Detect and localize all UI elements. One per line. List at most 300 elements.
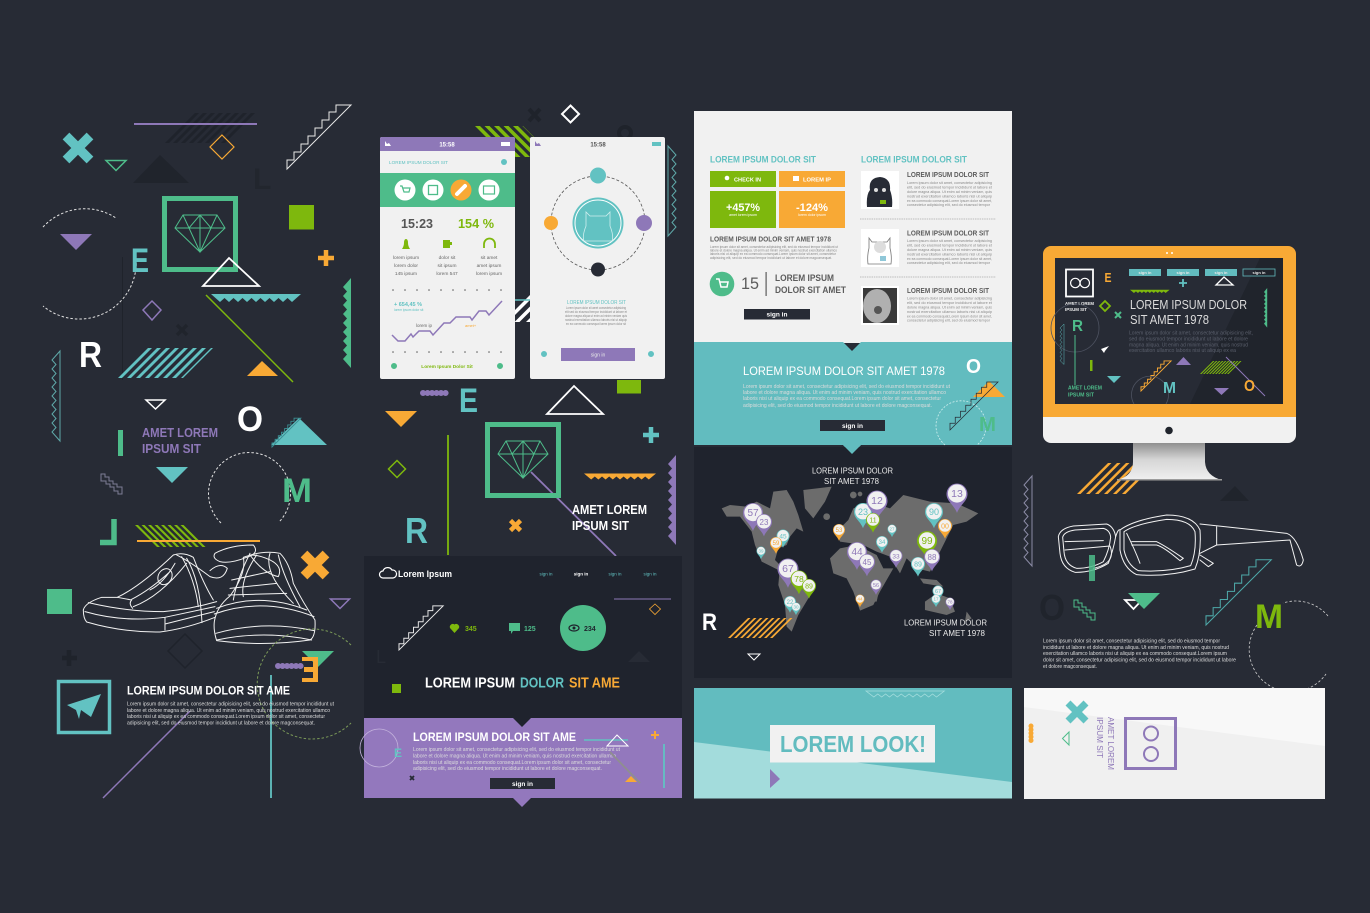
- orange stairs: [1141, 361, 1171, 391]
- white hatch between phones: [519, 290, 566, 322]
- lime diamond: [1100, 301, 1110, 311]
- purple line: [1226, 357, 1265, 396]
- screen title: [1130, 298, 1247, 327]
- letter R: R: [702, 609, 717, 636]
- dark triangle: [133, 155, 189, 183]
- lorem ip icon: [793, 176, 799, 181]
- body text: Lorem ipsum dolor sit amet, consectetur adipisicing elit, sed do eiusmod tempor incididunt ut: [127, 702, 335, 708]
- body text: et dolore magconsequat.: [1043, 664, 1097, 670]
- dark cross: [529, 109, 540, 121]
- purple diagonal line: [103, 711, 190, 798]
- olive diamond: [388, 460, 406, 478]
- center avatar: [572, 198, 624, 248]
- button lorem ip: [779, 171, 845, 187]
- metric 234: 234: [584, 626, 596, 633]
- stat value green: +457%: [726, 202, 760, 214]
- zigzag: [1060, 324, 1064, 364]
- lime hatch: [146, 525, 196, 547]
- screen label: AMET LOREM: [1068, 386, 1102, 392]
- map pins: 17: [933, 597, 939, 602]
- map pins: 45: [863, 558, 872, 567]
- line chart: [392, 301, 502, 341]
- purple line: [134, 123, 257, 125]
- screen nav: sign in: [1177, 270, 1190, 275]
- body text: Lorem ipsum dolor sit amet, consectetur adipisicing elit, sed do eiusmod tempor incididunt ut: [710, 245, 838, 249]
- clock text: 15:58: [590, 142, 606, 148]
- sign in button: [744, 309, 810, 320]
- lime square: [617, 380, 641, 394]
- icon: bell: [402, 239, 410, 249]
- stat orange: [779, 191, 845, 228]
- icon: stairs: [399, 606, 443, 650]
- white small triangle: [1125, 600, 1142, 609]
- list item texts: Lorem ipsum dolor sit amet, consectetur adipisicing: [907, 239, 992, 243]
- chart sub label: lorem ipsum dolor sit: [394, 308, 424, 312]
- teal inverted triangle: [156, 467, 188, 483]
- icon: heart: [450, 624, 459, 633]
- teal sawtooth: [211, 294, 301, 302]
- screen nav: [1129, 269, 1275, 276]
- zigzag: [866, 691, 944, 697]
- screen: [1055, 258, 1283, 404]
- button check in: [710, 171, 776, 187]
- thin circle: [1051, 304, 1099, 352]
- teal triangle: [1107, 376, 1121, 383]
- panel: right phone: [530, 137, 665, 379]
- icon: cloud: [380, 568, 397, 578]
- teal triangle with stairs: [271, 418, 327, 445]
- list item texts: [907, 181, 992, 322]
- letter M: M: [979, 414, 996, 436]
- body text: labore et dolore magna aliqua. Ut enim ad minim veniam, quis nostrud exercitation ullamco: [710, 248, 837, 252]
- stat sub green: amet lorem ipsum: [729, 213, 757, 217]
- dashed orbit: [551, 176, 645, 270]
- check in icon: [725, 176, 729, 180]
- map pins: [743, 484, 968, 615]
- icon: headphones: [484, 238, 495, 248]
- metric 125: 125: [524, 626, 536, 633]
- list item texts: ex ea commodo consequat.Lorem ipsum dolor sit amet,: [907, 257, 992, 261]
- phone body text: ex ea commodo consequat lorem ipsum dolor sit: [566, 322, 626, 326]
- white small triangle: [146, 400, 165, 409]
- green triangle: [1062, 732, 1069, 745]
- nav links: sign in: [643, 572, 657, 576]
- purple beads: [422, 392, 447, 394]
- phone header: [380, 137, 515, 151]
- teal frame: [58, 682, 110, 732]
- battery: [501, 142, 510, 146]
- orange hatch: [738, 618, 784, 638]
- letter E: E: [459, 382, 478, 420]
- dark triangle: [1220, 486, 1249, 501]
- feature texts: dolor sit: [439, 255, 456, 261]
- list item texts: consectetur adipisicing elit, sed do eiusmod tempor: [907, 318, 991, 322]
- teal zigzag: [52, 351, 60, 441]
- feature texts: 145 ipsum: [395, 271, 417, 277]
- notch: [513, 718, 531, 727]
- panel: lorem look banner: [694, 688, 1012, 798]
- map title: SIT AMET 1978: [824, 477, 880, 486]
- lorem ip label: LOREM IP: [803, 178, 831, 184]
- map pins: 90: [929, 507, 939, 517]
- panel: dark website hero: [364, 556, 682, 718]
- dark triangle: [628, 651, 650, 662]
- feature texts: lorem 547: [436, 271, 458, 277]
- zigzag: [1024, 476, 1032, 566]
- dots: [544, 351, 651, 357]
- body text: [1043, 638, 1236, 670]
- body text: [127, 702, 335, 726]
- panel: white business card: [1024, 688, 1325, 799]
- screen body: Lorem ipsum dolor sit amet, consectetur adipisicing elit,: [1129, 330, 1253, 336]
- lime square: [289, 205, 314, 230]
- dark hatch: [180, 113, 243, 143]
- teal stairs: [1206, 560, 1271, 625]
- body text: laboris nisi ut aliquip ex ea commodo consequat.Lorem ipsum dolor sit amet, consectetur: [413, 760, 611, 766]
- map pins: 45: [779, 533, 787, 540]
- thumbnail 2: [861, 229, 899, 267]
- icon: bandage: [450, 180, 472, 200]
- stat: time: 15:23: [401, 216, 433, 231]
- screen nav: sign in: [1139, 270, 1152, 275]
- list item texts: Lorem ipsum dolor sit amet, consectetur adipisicing: [907, 296, 992, 300]
- list item texts: elit, sed do eiusmod tempor incididunt ut labore et: [907, 301, 992, 305]
- purple triangle: [770, 769, 780, 788]
- body text: laboris nisi ut aliquip ex ea commodo consequat.Lorem ipsum dolor sit amet, consectetur: [710, 252, 837, 256]
- letter E: E: [1104, 270, 1112, 285]
- heading: lorem ipsum dolor sit ame: LOREM IPSUM: [425, 676, 515, 692]
- panel: monitor: [1043, 246, 1296, 480]
- letter M: M: [1163, 380, 1176, 397]
- dark letter L: L: [253, 163, 271, 196]
- letter reversed E: [302, 657, 318, 682]
- list item texts: elit, sed do eiusmod tempor incididunt ut labore et: [907, 186, 992, 190]
- map pins: 78: [947, 600, 953, 605]
- map pins: 59: [773, 541, 780, 547]
- signal icon: [385, 141, 391, 146]
- list item texts: dolore magna aliqua. Ut enim ad minim veniam, quis: [907, 248, 992, 252]
- number 15: 15: [741, 274, 759, 293]
- heading: lorem ipsum dolor sit ame: [425, 676, 620, 692]
- thin arc: [1132, 376, 1168, 404]
- body text: [710, 245, 838, 260]
- stat sub orange: lorem dolor ipsum: [798, 213, 826, 217]
- rotated label: IPSUM SIT: [1095, 717, 1104, 758]
- heading: lorem ipsum dolor sit ame: DOLOR: [520, 676, 564, 692]
- heading: amet lorem: AMET LOREM: [142, 425, 218, 440]
- body text: [413, 747, 621, 772]
- light band: [1024, 688, 1325, 746]
- icon: save: [422, 180, 444, 200]
- cart glyph: [716, 279, 728, 290]
- white triangle: [203, 258, 259, 286]
- letter M: M: [282, 472, 312, 510]
- heading: ipsum sit: IPSUM SIT: [142, 441, 201, 456]
- map pins: 23: [760, 518, 769, 527]
- body text: adipisicing elit, sed do eiusmod tempor incididunt ut labore et dolore magconsequat.: [710, 256, 832, 260]
- clock text: 15:58: [439, 142, 455, 148]
- lime square: [392, 684, 401, 693]
- heading: lorem look: LOREM LOOK!: [780, 731, 926, 757]
- map caption: [904, 618, 987, 638]
- map pins: 99: [921, 536, 933, 547]
- callout text: DOLOR SIT AMET: [775, 285, 846, 295]
- map pins: 78: [794, 574, 804, 584]
- panel: left phone: [380, 137, 515, 379]
- chart value: + 654,45 %: [394, 302, 422, 308]
- list item texts: consectetur adipisicing elit, sed do eiusmod tempor: [907, 261, 991, 265]
- brand name: Lorem Ipsum: [398, 569, 452, 579]
- check in label: CHECK IN: [734, 178, 761, 184]
- list item titles: [907, 172, 990, 295]
- purple small triangle: [330, 599, 350, 608]
- stand: [1117, 443, 1222, 480]
- phone heading: LOREM IPSUM DOLOR SIT: [567, 300, 626, 306]
- chart label orange: amet+: [465, 323, 477, 328]
- stairs on triangle: [272, 418, 301, 447]
- icon: glasses vertical: [1144, 726, 1158, 761]
- panel: purple banner: [360, 718, 682, 807]
- callout text: LOREM IPSUM: [775, 273, 834, 283]
- list item texts: ex ea commodo consequat.Lorem ipsum dolor sit amet,: [907, 314, 992, 318]
- teal line: [584, 739, 628, 741]
- dark diamond: [168, 634, 202, 668]
- map pins: 34: [879, 540, 886, 546]
- stat green: [710, 191, 776, 228]
- top dots: [1167, 252, 1172, 254]
- phone body text: dolore magna aliqua ut enim ad minim veniam quis: [565, 314, 627, 318]
- feature texts: [393, 255, 502, 277]
- stand base edge: [1117, 479, 1222, 480]
- green line: [1074, 335, 1076, 385]
- olive diagonal line: [206, 295, 293, 382]
- heading right: LOREM IPSUM DOLOR SIT: [861, 154, 967, 164]
- right orbit icon: [636, 215, 652, 231]
- dashed circle: [43, 209, 136, 319]
- screen nav: sign in: [1253, 270, 1266, 275]
- stairs: [950, 382, 998, 430]
- list item titles: LOREM IPSUM DOLOR SIT: [907, 230, 990, 238]
- green square: [47, 589, 72, 614]
- purple triangle: [1176, 357, 1191, 365]
- green triangle: [1128, 593, 1160, 609]
- map pins: 23: [858, 507, 868, 517]
- dark letter O: O: [1039, 587, 1065, 628]
- orange beads: [1030, 725, 1032, 742]
- frame: [1043, 246, 1296, 417]
- purple beads: [277, 664, 302, 668]
- map pins: 53: [836, 528, 843, 534]
- dark O: [619, 127, 631, 139]
- panel: world map: [694, 445, 1012, 678]
- screen body: sed do eiusmod tempor incididunt ut labore et dolore: [1129, 336, 1248, 342]
- nav links: [539, 572, 657, 576]
- icon: cart: [394, 180, 416, 200]
- lime bar: [1090, 360, 1092, 371]
- screen title: LOREM IPSUM DOLOR: [1130, 298, 1247, 312]
- lime hatch: [490, 126, 538, 157]
- phone body text: [565, 306, 627, 326]
- rotated label: [1095, 717, 1115, 770]
- phone body text: elit sed do eiusmod tempor incididunt ut labore et: [565, 310, 627, 314]
- map pins: 44: [851, 547, 863, 558]
- icon: cup: [443, 240, 452, 248]
- map pins: 57: [747, 508, 759, 519]
- battery: [652, 142, 661, 146]
- icon: eye: [569, 625, 579, 631]
- body text: labore et dolore magna aliqua. Ut enim ad minim veniam, quis nostrud exercitation ullamco: [413, 754, 616, 760]
- lighter band: [694, 742, 1012, 798]
- phone body text: Lorem ipsum dolor sit amet consectetur adipisicing: [566, 306, 626, 310]
- nav links: sign in: [608, 572, 622, 576]
- body text: adipisicing elit, sed do eiusmod tempor incididunt ut labore et dolore magconsequat.: [413, 766, 602, 772]
- stat value orange: -124%: [796, 202, 828, 214]
- heading: LOREM IPSUM DOLOR SIT AMET 1978: [743, 364, 945, 378]
- body text: Lorem ipsum dolor sit amet, consectetur adipisicing elit, sed do eiusmod tempor: [1043, 638, 1220, 644]
- orange diamond: [650, 604, 660, 614]
- teal hatch: [133, 348, 198, 378]
- map pins: 13: [951, 488, 963, 500]
- list item texts: consectetur adipisicing elit, sed do eiusmod tempor: [907, 203, 991, 207]
- teal cross: [1068, 703, 1086, 721]
- teal cross: [1115, 312, 1121, 318]
- icon: screen: [478, 180, 500, 200]
- letter E: E: [394, 746, 402, 760]
- dashed separators: [860, 219, 996, 277]
- faint circle: [360, 729, 398, 767]
- sign in button: [820, 420, 885, 431]
- dashed arc: [209, 453, 291, 523]
- letter R: R: [405, 510, 428, 551]
- white triangle: [1216, 277, 1233, 285]
- body text: labore et dolore magna aliqua. Ut enim ad minim veniam, quis nostrud exercitation ullamco: [743, 390, 946, 396]
- orange cross: [304, 554, 326, 576]
- bottom orbit icon: [591, 262, 605, 276]
- body text: Lorem ipsum dolor sit amet, consectetur adipisicing elit, sed do eiusmod tempor incididunt ut: [413, 747, 621, 753]
- icon: diamond gem: [175, 215, 225, 252]
- lime sawtooth: [1130, 290, 1170, 293]
- icon: diamond gem: [498, 441, 548, 478]
- callout text: [775, 273, 846, 295]
- list item texts: nostrud exercitation ullamco laboris nisi ut aliquip: [907, 194, 992, 198]
- feature texts: lorem ipsum: [393, 255, 419, 261]
- map pins: 44: [857, 597, 863, 602]
- body text: adipisicing elit, sed do eiusmod tempor incididunt ut labore et dolore magconsequat.: [743, 403, 932, 409]
- white triangle: [547, 386, 603, 414]
- screen shade: [1190, 258, 1283, 404]
- orange triangle: [625, 776, 637, 782]
- body text: [743, 384, 951, 409]
- feature texts: sit amet: [481, 255, 498, 261]
- letter E: E: [131, 242, 149, 280]
- list item texts: nostrud exercitation ullamco laboris nisi ut aliquip: [907, 252, 992, 256]
- green corner bracket: [100, 519, 114, 542]
- screen body: [1129, 330, 1253, 354]
- dotted rows: [393, 290, 501, 352]
- body text: laboris nisi ut aliquip ex ea commodo consequat.Lorem ipsum dolor sit amet, consectetur: [127, 714, 325, 720]
- nav links: sign in: [539, 572, 553, 576]
- letter O: O: [1244, 378, 1255, 395]
- separator: [766, 272, 767, 296]
- heading: lorem ipsum: LOREM IPSUM DOLOR SIT AME: [127, 684, 290, 698]
- teal plus: [643, 427, 659, 443]
- feature texts: lorem ipsum: [476, 271, 502, 277]
- body text: exercitation ullamco laboris nisi ut aliquip ex ea commodo consequat.Lorem ipsum: [1043, 651, 1227, 657]
- icon: teal cross: [66, 136, 90, 160]
- orange line: [137, 540, 260, 542]
- olive line: [447, 435, 449, 555]
- panel: teal banner: [694, 342, 1012, 454]
- panel: center geometric poster: [385, 380, 676, 556]
- body text: Lorem ipsum dolor sit amet, consectetur adipisicing elit, sed do eiusmod tempor incididunt ut: [743, 384, 951, 390]
- sign in label: sign in: [512, 781, 533, 788]
- screen label: IPSUM SIT: [1068, 392, 1094, 398]
- glasses icon: [1071, 278, 1090, 288]
- feature texts: lorem dolor: [394, 263, 418, 269]
- badge label: IPSUM SIT: [1065, 307, 1087, 312]
- stat: percent: 154 %: [458, 216, 494, 231]
- stepped outline: [101, 474, 122, 494]
- map pins: 30: [793, 605, 799, 610]
- white box: [770, 725, 935, 762]
- green sawtooth: [1264, 288, 1267, 328]
- feature texts: amet ipsum: [477, 263, 501, 269]
- icon: chat: [509, 623, 520, 634]
- list item texts: dolore magna aliqua. Ut enim ad minim veniam, quis: [907, 190, 992, 194]
- white triangle: [607, 735, 628, 746]
- footer: Lorem Ipsum Dolor Sit: [421, 364, 473, 370]
- teal line: [514, 299, 531, 301]
- orange plus: [318, 250, 334, 266]
- dashed circle: [936, 401, 986, 445]
- rotated label: AMET LOREM: [1106, 717, 1115, 770]
- body text: labore et dolore magna aliqua. Ut enim ad minim veniam, quis nostrud exercitation ullamco: [127, 708, 330, 714]
- map pins: 67: [935, 589, 941, 595]
- panel: left geometric poster: [43, 105, 351, 798]
- dark cross: [410, 776, 414, 780]
- sign in button: [490, 778, 555, 789]
- teal zigzag: [668, 146, 676, 236]
- map pins: 89: [805, 583, 813, 590]
- orange plus: [651, 731, 659, 739]
- purple diagonal line: [531, 472, 616, 556]
- feature texts: sit ipsum: [438, 263, 456, 269]
- dark vertical line: [122, 257, 124, 380]
- top orbit icon: [590, 168, 606, 184]
- panel: light website dashboard: [694, 111, 1012, 343]
- map pins: 27: [889, 527, 895, 532]
- footer dots: [394, 363, 500, 369]
- screen body: magna aliqua. Ut enim ad minim veniam, quis nostrud: [1129, 342, 1248, 348]
- subheading: LOREM IPSUM DOLOR SIT AMET 1978: [710, 234, 831, 244]
- purple diamond: [143, 301, 161, 320]
- heading: LOREM IPSUM DOLOR SIT AME: [413, 730, 576, 744]
- orange triangle: [973, 381, 1005, 397]
- icon: paper plane: [67, 694, 101, 719]
- teal bar: [1089, 555, 1095, 581]
- green icon band: [380, 173, 515, 207]
- teal line vertical: [663, 744, 665, 788]
- map pins: 88: [928, 553, 937, 562]
- map pins: 00: [941, 523, 949, 530]
- sign in button: [561, 348, 635, 361]
- dark L: L: [376, 647, 386, 667]
- heading: ipsum sit: IPSUM SIT: [572, 518, 629, 533]
- sign in label: sign in: [767, 312, 787, 318]
- screen body: exercitation ullamco laboris nisi ut aliquip ex ea: [1129, 348, 1236, 354]
- list item texts: ex ea commodo consequat.Lorem ipsum dolor sit amet,: [907, 199, 992, 203]
- list item titles: LOREM IPSUM DOLOR SIT: [907, 172, 990, 179]
